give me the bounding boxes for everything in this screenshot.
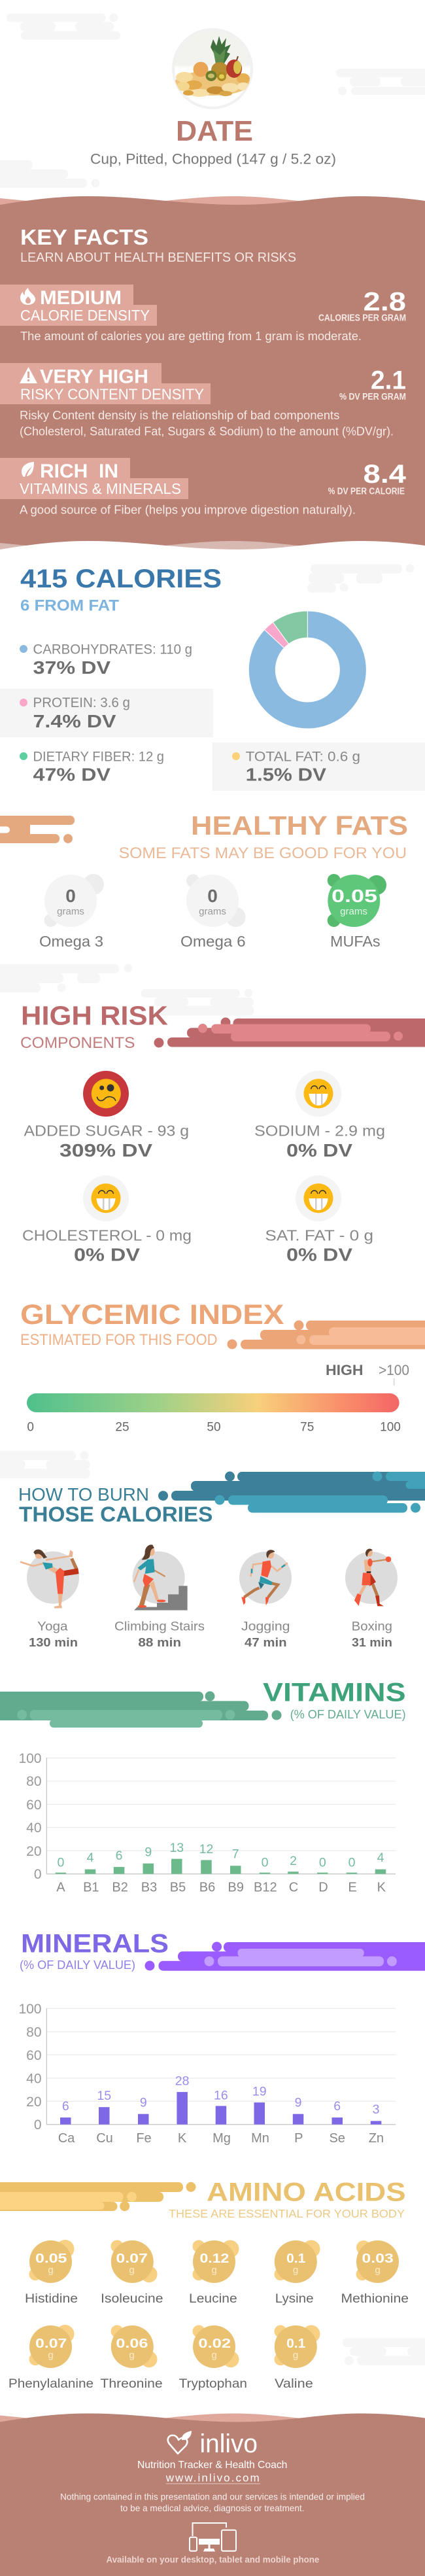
fat: omega 6 [180,874,246,950]
glycemic scale: 50 [207,1421,221,1434]
bar chart: minerals: 6 [333,2099,341,2114]
exercise: boxing label: Boxing [352,1619,392,1633]
bar chart: vitamins: C [289,1880,298,1894]
amino acid: tryptophan: g [211,2350,217,2361]
panel: footer [0,2414,425,2576]
glycemic scale: 100 [380,1421,401,1434]
fat: omega 6: Omega 6 [180,933,246,950]
exercise: boxing label: 31 min [352,1635,392,1649]
amino acid: isoleucine: g [129,2265,135,2276]
calorie density fact [0,285,406,343]
risk: sodium: SODIUM - 2.9 mg [254,1123,385,1140]
amino acid: threonine [100,2325,163,2391]
glycemic scale: 25 [115,1421,129,1434]
amino acid: tryptophan: 0.02 [198,2337,231,2351]
risk: added sugar [24,1071,189,1160]
risky content density fact: 2.1 [371,366,406,395]
minerals heading: MINERALS [21,1929,169,1958]
bar chart: vitamins: B9 [228,1880,244,1894]
background cloud: amino acids [343,2338,425,2365]
amino acid: methionine [341,2240,409,2306]
donut chart: macronutrients [248,611,366,729]
calorie density fact: The amount of calories you are getting from 1 gram is moderate. [20,330,362,343]
calorie density fact: CALORIES PER GRAM [318,313,406,324]
how to burn heading: HOW TO BURN [18,1484,149,1505]
risky content density fact: RISKY CONTENT DENSITY [20,385,204,402]
minerals heading: (% OF DAILY VALUE) [20,1958,135,1972]
exercise: yoga label [29,1619,78,1649]
amino acid: leucine: g [211,2265,217,2276]
vitamins heading: (% OF DAILY VALUE) [290,1707,406,1721]
calories heading [20,565,222,615]
amino acid: threonine: Threonine [100,2376,163,2391]
legend: dietary fiber: DIETARY FIBER: 12 g [33,748,164,764]
bar chart: minerals: 80 [26,2025,42,2040]
amino acid: lysine [275,2240,320,2306]
amino acid: isoleucine: Isoleucine [101,2291,163,2306]
glycemic index heading [20,1299,284,1349]
bar chart: vitamins: 4 [87,1851,94,1865]
vitamins heading [263,1678,406,1721]
bar chart: minerals [18,2002,396,2146]
risk: saturated fat: SAT. FAT - 0 g [265,1227,373,1244]
key facts heading [20,225,296,265]
risk: saturated fat: 0% DV [286,1245,352,1265]
healthy fats heading [119,810,408,862]
key facts heading: KEY FACTS [20,225,148,249]
exercise: climbing stairs label [114,1619,205,1649]
legend: dietary fiber [20,748,164,785]
fat: omega 3: grams [57,906,84,917]
bar chart: vitamins [18,1751,396,1894]
legend: total fat: 1.5% DV [246,765,326,785]
bar chart: minerals: 60 [26,2048,42,2063]
amino acid: leucine: Leucine [189,2291,237,2306]
risk: added sugar: 309% DV [60,1140,152,1160]
bar chart: minerals: 100 [18,2002,42,2017]
exercise: jogging label: 47 min [245,1635,287,1649]
logo: inlivo: inlivo [200,2429,258,2458]
amino acid: threonine: g [129,2350,135,2361]
decoration: vitamins streaks [0,1692,281,1728]
bar chart: minerals: Ca [58,2131,75,2146]
bar chart: vitamins: 0 [319,1855,326,1870]
bar chart: vitamins: 12 [199,1842,213,1856]
bar chart: vitamins: 2 [290,1854,297,1868]
vitamins and minerals fact: VITAMINS & MINERALS [20,480,181,497]
amino acids heading: AMINO ACIDS [207,2178,406,2206]
exercise: jogging label: Jogging [241,1619,290,1633]
glycemic index heading: GLYCEMIC INDEX [20,1299,284,1331]
bar chart: minerals: 28 [175,2074,189,2089]
glycemic scale: HIGH [326,1362,364,1378]
bar chart: minerals: 6 [62,2099,69,2114]
bar chart: vitamins: 0 [348,1855,356,1870]
bar chart: minerals: 20 [26,2095,42,2110]
calorie density fact: 2.8 [364,287,406,316]
how to burn heading [18,1484,212,1526]
exercise: yoga label: Yoga [37,1619,68,1633]
amino acid: methionine: 0.03 [362,2252,394,2266]
legend band backgrounds [0,689,425,791]
fat: omega 6: grams [199,906,226,917]
amino acid: histidine: 0.05 [35,2252,67,2266]
amino acid: lysine: 0.1 [286,2252,305,2266]
fat: MUFAs: grams [340,906,367,917]
amino acid: phenylalanine: g [48,2350,54,2361]
legend: carbohydrates: CARBOHYDRATES: 110 g [33,641,192,657]
risky content density fact: % DV PER GRAM [339,391,406,402]
bar chart: vitamins: 13 [169,1841,184,1855]
decoration: burn streaks [158,1472,425,1512]
bar chart: vitamins: A [56,1880,65,1894]
fat: MUFAs [328,874,386,950]
legend: total fat [232,748,360,785]
glycemic scale: >100 [379,1362,409,1378]
amino acid: tryptophan: Tryptophan [179,2376,247,2391]
calorie density fact: MEDIUM [40,287,122,309]
bar chart: vitamins: K [377,1880,386,1894]
vitamins and minerals fact: 8.4 [364,460,407,489]
amino acid: phenylalanine [8,2325,94,2391]
risky content density fact: VERY HIGH [40,366,148,387]
legend: carbohydrates: 37% DV [33,657,110,678]
bar chart: minerals: 19 [252,2084,267,2098]
bar chart: vitamins: 60 [26,1798,42,1813]
bar chart: vitamins: 4 [377,1851,384,1865]
exercise: boxing label [352,1619,392,1649]
bar chart: minerals: 16 [214,2088,228,2102]
amino acid: valine: Valine [275,2376,313,2391]
exercise: jogging [239,1550,292,1605]
bar chart: minerals: 9 [295,2096,301,2110]
amino acid: phenylalanine: 0.07 [35,2337,67,2351]
disclaimer: to be a medical advice, diagnosis or treatment. [120,2503,305,2513]
vitamins heading: VITAMINS [263,1678,406,1707]
amino acids heading: THESE ARE ESSENTIAL FOR YOUR BODY [169,2207,405,2220]
risky content density fact: (Cholesterol, Saturated Fat, Sugars & Sodium) to the amount (%DV/gr). [20,425,394,438]
amino acid: valine: 0.1 [286,2337,305,2351]
amino acid: methionine: Methionine [341,2291,409,2306]
amino acids heading [169,2178,406,2220]
fat: omega 3: 0 [65,886,76,906]
logo: inlivo [168,2429,258,2458]
legend: dietary fiber: 47% DV [33,765,110,785]
glycemic scale: 75 [300,1421,314,1434]
bar chart: vitamins: 0 [34,1867,42,1882]
bar chart: minerals: Fe [136,2131,152,2146]
amino acid: valine [275,2325,320,2391]
calories heading: 6 FROM FAT [20,597,119,615]
exercise: boxing [345,1548,398,1606]
exercise: yoga label: 130 min [29,1635,78,1649]
decoration: glycemic streaks [228,1320,425,1349]
decoration: healthy fats streaks [0,816,75,843]
disclaimer: Nothing contained in this presentation and our services is intended or implied [60,2492,365,2502]
bar chart: vitamins: B2 [112,1880,128,1894]
risk: sodium: 0% DV [286,1140,352,1160]
bar chart: minerals: P [294,2131,303,2146]
healthy fats heading: SOME FATS MAY BE GOOD FOR YOU [119,844,407,862]
high risk heading: COMPONENTS [20,1034,135,1052]
background clouds: calories [307,564,415,593]
calories heading: 415 CALORIES [20,565,222,593]
bar chart: vitamins: 40 [26,1820,42,1836]
amino acid: valine: g [293,2350,298,2361]
risk: cholesterol: 0% DV [74,1245,140,1265]
fat: MUFAs: 0.05 [332,886,377,906]
fat: omega 3 [39,874,104,950]
bar chart: vitamins: 100 [18,1751,42,1766]
bar chart: vitamins: B1 [83,1880,99,1894]
risk: added sugar: ADDED SUGAR - 93 g [24,1123,189,1140]
fat: omega 3: Omega 3 [39,933,103,950]
fat: MUFAs: MUFAs [330,933,381,950]
calorie density fact: CALORIE DENSITY [20,307,150,324]
bar chart: minerals: 40 [26,2071,42,2087]
fat: omega 6: 0 [207,886,218,906]
glycemic index heading: ESTIMATED FOR THIS FOOD [20,1331,217,1349]
bar chart: vitamins: B5 [170,1880,186,1894]
risky content density fact [0,363,406,438]
bar chart: minerals: Zn [369,2131,384,2146]
bar chart: vitamins: B3 [141,1880,157,1894]
amino acid: histidine: g [48,2265,54,2276]
availability note: Available on your desktop, tablet and mobile phone [106,2554,320,2565]
amino acid: histidine: Histidine [25,2291,78,2306]
how to burn heading: THOSE CALORIES [19,1503,212,1526]
exercise: climbing stairs [133,1544,188,1610]
tagline and website: Nutrition Tracker & Health Coach [137,2460,287,2471]
amino acid: leucine [189,2240,239,2306]
amino acid: tryptophan [179,2325,247,2391]
vitamins and minerals fact: % DV PER CALORIE [328,486,405,497]
vitamins and minerals fact: RICH IN [40,461,118,482]
exercise: climbing stairs label: 88 min [138,1635,181,1649]
food photo [173,29,252,108]
high risk heading: HIGH RISK [21,1001,168,1031]
amino acid: histidine [25,2240,78,2306]
serving size subtitle: Cup, Pitted, Chopped (147 g / 5.2 oz) [90,150,336,167]
bar chart: minerals: Se [329,2131,345,2146]
legend: protein: 7.4% DV [33,711,116,731]
bar chart: minerals: 0 [34,2117,42,2132]
background clouds: burn [0,1451,90,1478]
high risk heading [20,1001,168,1052]
legend: carbohydrates [20,641,192,678]
minerals heading [20,1929,169,1972]
exercise: yoga [20,1550,79,1609]
bar chart: minerals: 15 [97,2089,111,2103]
healthy fats heading: HEALTHY FATS [191,810,408,841]
tagline and website [137,2460,287,2484]
exercise: jogging label [241,1619,290,1649]
legend: total fat: TOTAL FAT: 0.6 g [246,748,360,764]
glycemic scale: 0 [27,1421,34,1434]
bar chart: minerals: K [178,2131,187,2146]
bar chart: vitamins: 6 [116,1849,122,1863]
risk: saturated fat [265,1175,373,1265]
background clouds: header [0,13,425,188]
legend: protein: PROTEIN: 3.6 g [33,695,130,710]
vitamins and minerals fact: A good source of Fiber (helps you improve digestion naturally). [20,504,356,517]
bar chart: minerals: 3 [373,2102,379,2117]
decoration: minerals streaks [145,1941,425,1971]
legend: protein [20,695,130,731]
risk: cholesterol: CHOLESTEROL - 0 mg [22,1227,192,1244]
glycemic scale [27,1362,409,1434]
risk: cholesterol [22,1175,192,1265]
amino acid: threonine: 0.06 [116,2337,148,2351]
amino acid: lysine: g [293,2265,298,2276]
bar chart: vitamins: 7 [232,1847,239,1862]
bar chart: vitamins: 0 [57,1855,64,1870]
bar chart: minerals: Mg [212,2131,231,2146]
bar chart: minerals: Mn [251,2131,269,2146]
bar chart: vitamins: B6 [199,1880,215,1894]
bar chart: vitamins: 0 [262,1855,269,1870]
key facts heading: LEARN ABOUT HEALTH BENEFITS OR RISKS [20,251,296,265]
bar chart: vitamins: 20 [26,1844,42,1859]
risky content density fact: Risky Content density is the relationship of bad components [20,409,339,422]
bar chart: minerals: 9 [140,2096,147,2110]
amino acid: leucine: 0.12 [200,2252,229,2266]
tagline and website: www.inlivo.com [165,2471,260,2484]
amino acid: phenylalanine: Phenylalanine [8,2376,94,2391]
title: DATE [176,115,253,147]
amino acid: isoleucine [101,2240,163,2306]
exercise: climbing stairs label: Climbing Stairs [114,1619,205,1633]
amino acid: isoleucine: 0.07 [116,2252,148,2266]
bar chart: vitamins: 9 [144,1845,152,1859]
decoration: high risk streaks [154,1018,425,1048]
amino acid: lysine: Lysine [275,2291,314,2306]
decoration: amino acids streaks [0,2182,196,2211]
bar chart: vitamins: D [318,1880,328,1894]
icon: devices [190,2523,236,2551]
panel: key facts [0,196,425,557]
background clouds: high risk [0,964,254,1015]
amino acid: methionine: g [375,2265,381,2276]
bar chart: minerals: Cu [96,2131,113,2146]
bar chart: vitamins: B12 [254,1880,277,1894]
vitamins and minerals fact [0,458,407,517]
disclaimer [60,2492,365,2513]
bar chart: vitamins: 80 [26,1774,42,1789]
bar chart: vitamins: E [348,1880,357,1894]
risk: sodium [254,1071,385,1160]
